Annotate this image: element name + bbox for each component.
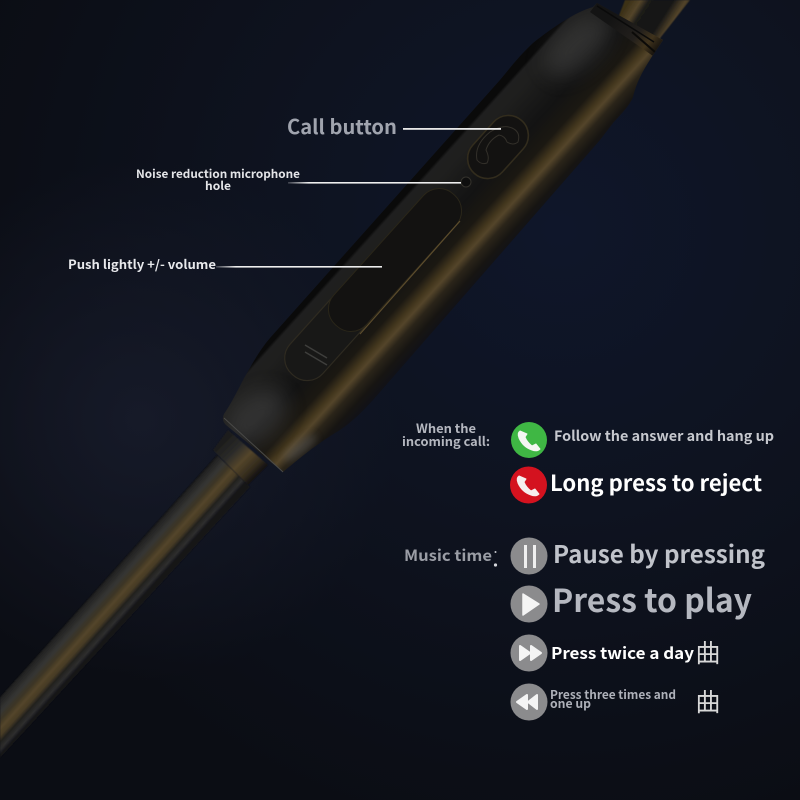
icon: play (510, 586, 548, 622)
text: press three times and one up: one up (550, 695, 591, 712)
callout: call button: Call button (287, 111, 397, 140)
heading: when the incoming call: When the (416, 418, 476, 437)
icon: green phone (511, 422, 547, 458)
lower collar (213, 430, 268, 485)
text: press to play: Press to play (552, 576, 752, 622)
heading: music time: Music time (404, 544, 492, 566)
leader line (288, 182, 461, 184)
icon: rewind (510, 684, 548, 720)
remote body (223, 3, 663, 472)
upper cables (618, 0, 690, 42)
collar band (590, 3, 663, 56)
volume lower button (276, 284, 377, 389)
lower cable (0, 455, 250, 758)
leader line (216, 266, 382, 268)
leader line (403, 128, 501, 130)
rocker lit edge (360, 221, 460, 334)
heading: when the incoming call (402, 418, 490, 450)
icon: song character: 曲 (695, 683, 721, 719)
body highlights (214, 3, 663, 465)
volume rocker (320, 180, 470, 340)
text: pause by pressing: Pause by pressing (553, 535, 765, 570)
call button (459, 107, 537, 187)
heading: when the incoming call: incoming call: (402, 431, 490, 450)
callout: microphone hole: Noise reduction microphone (136, 166, 300, 182)
text: long press to reject: Long press to reject (550, 466, 762, 498)
text: answer and hang up: Follow the answer and hang up (554, 426, 774, 446)
microphone hole (461, 177, 471, 187)
icon: red phone (510, 466, 547, 504)
icon: embossed phone (477, 127, 519, 164)
text: press twice a day: Press twice a day (551, 640, 694, 664)
body end rim (224, 418, 283, 472)
callout: volume: Push lightly +/- volume (68, 254, 216, 273)
callout: microphone hole: hole (205, 178, 231, 194)
icon: fast forward (510, 634, 548, 672)
text: press three times and one up: Press three times and (550, 686, 676, 703)
colon dots (494, 551, 496, 553)
callout: microphone hole (136, 166, 461, 194)
icon: pause (510, 538, 548, 574)
text: press three times and one up (550, 686, 676, 712)
minus mark (305, 345, 327, 365)
icon: song character: 曲 (695, 634, 721, 670)
